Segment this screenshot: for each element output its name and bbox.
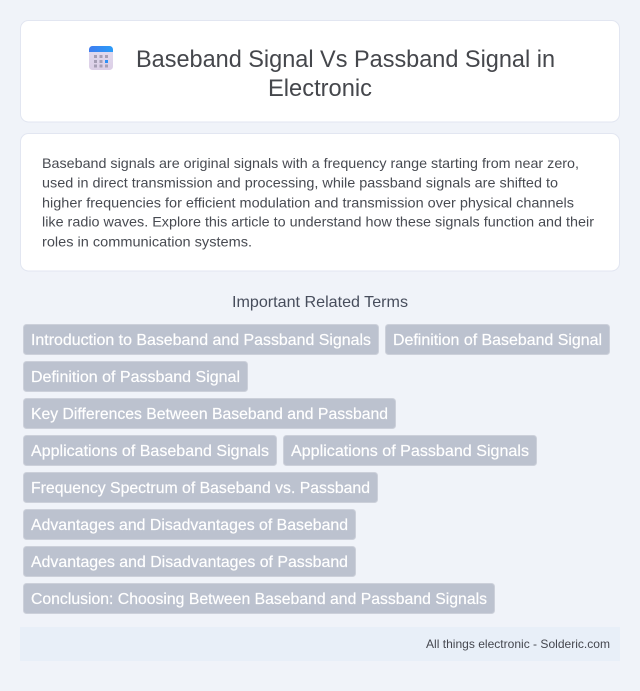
chip: advantages passband [24,546,356,576]
chip: key differences [24,398,396,428]
panel: related term chips [24,324,610,614]
chip: definition of baseband [386,324,610,354]
chip: applications of passband: Applications of Passband Signals [291,443,529,460]
chip: frequency spectrum [24,472,378,502]
title: Baseband Signal Vs Passband Signal in [136,46,555,73]
chip: applications of baseband: Applications of Baseband Signals [31,443,269,460]
chip: introduction [24,324,378,354]
heading: important related terms: Important Related Terms [232,294,408,311]
description text [42,155,594,250]
panel: description [20,134,620,271]
description text: used in direct transmission and processing, while passband signals are shifted to [42,175,558,191]
icon: calendar [89,46,113,70]
chip: advantages baseband: Advantages and Disadvantages of Baseband [31,517,348,534]
description text: higher frequencies for efficient modulation and transmission over physical channels [42,195,574,211]
chip: frequency spectrum: Frequency Spectrum of Baseband vs. Passband [31,480,370,497]
title [136,46,555,102]
title: Electronic [268,75,372,102]
description text: Baseband signals are original signals with a frequency range starting from near zero, [42,155,579,171]
footer: All things electronic - Solderic.com [426,637,610,651]
description text: roles in communication systems. [42,234,252,250]
chip: definition of baseband: Definition of Baseband Signal [393,332,602,349]
chip: definition of passband: Definition of Passband Signal [31,369,240,386]
chip: introduction: Introduction to Baseband and Passband Signals [31,332,371,349]
chip: advantages baseband [24,510,356,540]
chip: conclusion: Conclusion: Choosing Between Baseband and Passband Signals [31,591,487,608]
description text: like radio waves. Explore this article to understand how these signals function and their [42,214,594,230]
panel: title card [20,20,620,122]
chip: advantages passband: Advantages and Disadvantages of Passband [31,554,348,571]
chip: conclusion [24,584,494,614]
footer [20,627,620,661]
chip: key differences: Key Differences Between Baseband and Passband [31,406,388,423]
chip: applications of passband [284,436,536,466]
chip: applications of baseband [24,436,276,466]
chip: definition of passband [24,362,248,392]
